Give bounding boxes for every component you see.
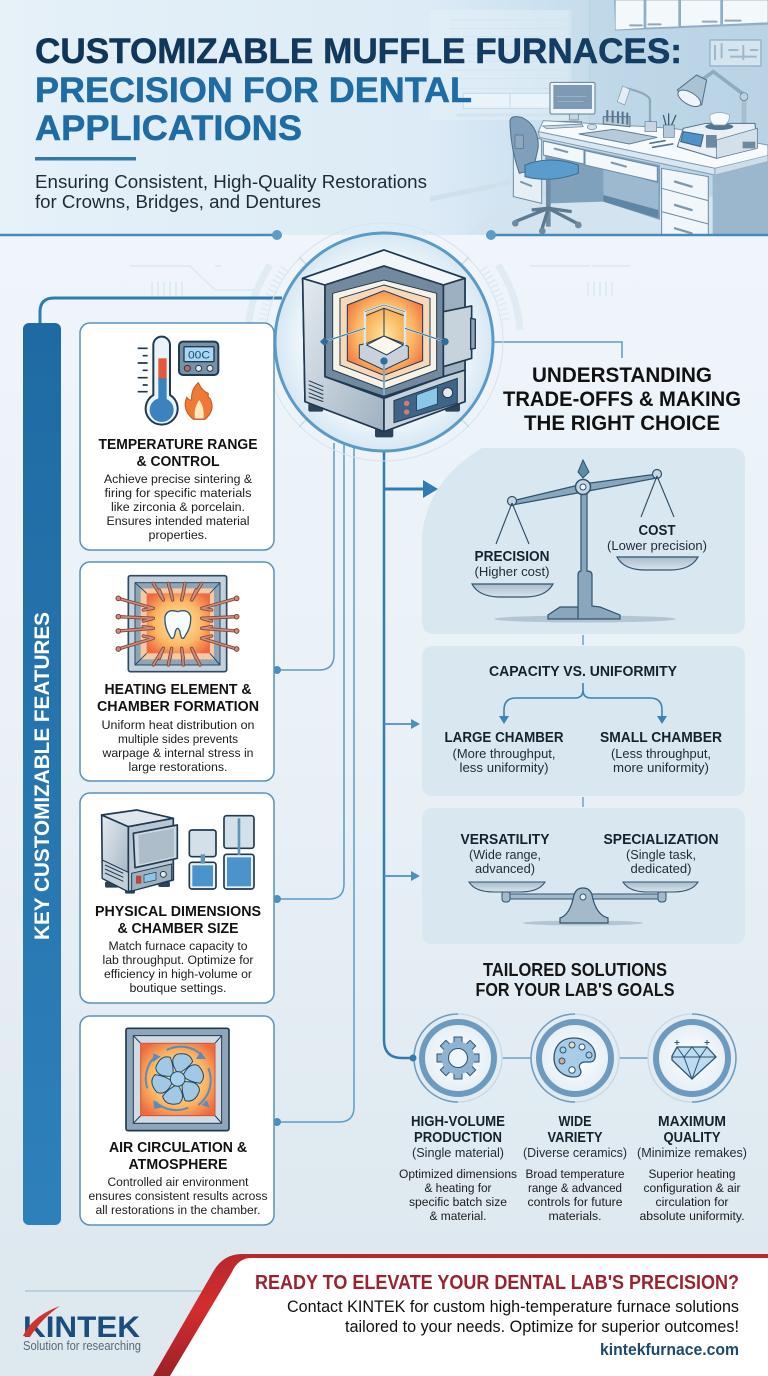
call to action text: kintekfurnace.com [600, 1341, 739, 1359]
label: small chamber: SMALL CHAMBER [600, 730, 723, 746]
header divider with nodes [0, 230, 768, 240]
goal text: specific batch size [409, 1195, 507, 1209]
label: precision: (Higher cost) [474, 564, 550, 579]
goal text: Broad temperature [526, 1167, 625, 1181]
card text [97, 682, 259, 774]
wall poster [710, 40, 761, 66]
faint technical background decoration [130, 265, 630, 330]
furnace control panel [394, 378, 457, 423]
goal text: Superior heating [648, 1167, 736, 1181]
goal text: range & advanced [528, 1181, 622, 1195]
label: large chamber: (More throughput, [452, 746, 556, 761]
title: APPLICATIONS [35, 109, 302, 148]
icon: furnace with chamber sizes [102, 810, 254, 894]
card text: TEMPERATURE RANGE [98, 437, 258, 453]
feature card: temperature [80, 323, 274, 550]
card text: all restorations in the chamber. [96, 1203, 260, 1217]
goal text: QUALITY [664, 1130, 721, 1146]
card text: properties. [148, 528, 208, 542]
connector: circle to sidebar [40, 298, 282, 323]
icon: balance scale [472, 460, 698, 622]
title: PRECISION FOR DENTAL [35, 71, 472, 110]
panel: capacity vs uniformity [422, 646, 745, 796]
card text: Ensures intended material [106, 514, 250, 528]
card text: Controlled air environment [108, 1175, 249, 1189]
sterilizer device with tooth [677, 112, 757, 158]
label: large chamber: less uniformity) [460, 760, 548, 775]
sidebar: key customizable features [23, 323, 61, 1225]
card text: multiple sides prevents [118, 732, 238, 746]
label: precision: PRECISION [474, 549, 550, 565]
goal: high volume [399, 1014, 517, 1223]
monitor [550, 82, 595, 124]
card text: ATMOSPHERE [128, 1157, 228, 1173]
card text: Match furnace capacity to [108, 939, 248, 953]
goal: maximum quality [637, 1014, 747, 1223]
card text: boutique settings. [130, 981, 226, 995]
card text: & CHAMBER SIZE [118, 921, 239, 937]
wall cabinets [614, 0, 768, 31]
furnace callouts [324, 328, 445, 395]
call to action text: tailored to your needs. Optimize for superior outcomes! [345, 1318, 739, 1336]
label: large chamber: LARGE CHAMBER [444, 730, 564, 746]
feature card: dimensions [80, 793, 274, 1003]
test tubes, small lamp and pens [603, 86, 676, 137]
label: cost: (Lower precision) [607, 538, 707, 553]
heading: trade-offs: THE RIGHT CHOICE [524, 412, 720, 435]
goal text [637, 1114, 747, 1223]
goal text: VARIETY [548, 1130, 603, 1146]
card text [88, 1140, 268, 1217]
chair [510, 117, 582, 234]
heading: trade-offs: TRADE-OFFS & MAKING [503, 388, 741, 411]
card text: Achieve precise sintering & [104, 472, 253, 486]
logo: KINTEK: Solution for researching [23, 1339, 141, 1353]
goal text: circulation for [656, 1195, 728, 1209]
goal text: (Single material) [412, 1145, 504, 1160]
branching arrows [499, 683, 667, 724]
label: small chamber [600, 730, 723, 775]
card text: AIR CIRCULATION & [109, 1140, 248, 1156]
label: large chamber [444, 730, 564, 775]
goal text: & heating for [424, 1181, 492, 1195]
feature card: air circulation [80, 1016, 274, 1225]
heading: trade-offs [503, 364, 741, 435]
label: cost: COST [638, 523, 676, 539]
card text [98, 437, 258, 542]
call to action text: Contact KINTEK for custom high-temperature furnace solutions [287, 1298, 739, 1316]
goal text: PRODUCTION [414, 1130, 502, 1146]
card text: efficiency in high-volume or [104, 967, 252, 981]
subtitle [35, 171, 427, 212]
label: specialization [604, 832, 718, 876]
subtitle: Ensuring Consistent, High-Quality Restorations [35, 171, 427, 192]
logo: KINTEK [23, 1306, 141, 1353]
call to action text [255, 1272, 739, 1359]
card text: firing for specific materials [104, 486, 252, 500]
heading: trade-offs: UNDERSTANDING [532, 364, 712, 387]
title [35, 32, 682, 148]
goal text: MAXIMUM [658, 1114, 726, 1130]
icon: palette [531, 1014, 619, 1102]
goal text: WIDE [558, 1114, 592, 1130]
connector: spine with arrows [384, 450, 438, 1058]
logo: KINTEK: KINTEK [23, 1311, 140, 1344]
goal text: & material. [430, 1209, 486, 1223]
icon: diamond [648, 1014, 736, 1102]
desk [513, 121, 768, 240]
subtitle: for Crowns, Bridges, and Dentures [35, 191, 321, 212]
panel: versatility vs specialization [422, 808, 745, 944]
card text: like zirconia & porcelain. [111, 500, 245, 514]
card text: warpage & internal stress in [102, 746, 254, 760]
goal text [399, 1114, 517, 1223]
furnace door [443, 306, 472, 367]
card text [95, 904, 261, 995]
panel: precision vs cost [422, 448, 745, 634]
label: precision [474, 549, 550, 579]
goal text: configuration & air [644, 1181, 740, 1195]
label: versatility: advanced) [475, 861, 535, 876]
title: CUSTOMIZABLE MUFFLE FURNACES: [35, 32, 682, 71]
goal text: (Minimize remakes) [637, 1145, 747, 1160]
label: small chamber: more uniformity) [613, 760, 709, 775]
sidebar: key customizable features: KEY CUSTOMIZABLE FEATURES [31, 612, 54, 940]
icon: level balance [469, 882, 698, 926]
heading: tailored solutions: TAILORED SOLUTIONS [483, 959, 667, 980]
card text: HEATING ELEMENT & [104, 682, 252, 698]
card text: PHYSICAL DIMENSIONS [95, 904, 261, 920]
card text: large restorations. [128, 760, 228, 774]
label: cost [607, 523, 707, 553]
icon: gear [414, 1014, 502, 1102]
footer [23, 1254, 768, 1376]
card text: Uniform heat distribution on [102, 718, 255, 732]
goal text [523, 1114, 627, 1223]
feature card: heating element [80, 562, 274, 781]
goal text: (Diverse ceramics) [523, 1145, 627, 1160]
panel: capacity vs uniformity: CAPACITY VS. UNIFORMITY [489, 664, 677, 680]
panel connector lines [582, 635, 584, 807]
goal: wide variety [523, 1014, 627, 1223]
big lamp [675, 72, 748, 126]
connectors between goal circles [412, 1057, 648, 1059]
goal text: HIGH-VOLUME [411, 1114, 505, 1130]
icon: heating chamber and tooth [116, 576, 239, 672]
footer red band and white panel [153, 1254, 768, 1376]
label: specialization: dedicated) [630, 861, 692, 876]
header band [0, 0, 768, 240]
goal text: Optimized dimensions [399, 1167, 517, 1181]
furnace medallion [265, 223, 503, 461]
label: versatility: VERSATILITY [460, 832, 550, 848]
label: specialization: (Single task, [626, 847, 696, 862]
card text: & CONTROL [136, 454, 220, 470]
goal text: controls for future [528, 1195, 623, 1209]
card text: CHAMBER FORMATION [97, 699, 259, 715]
icon: thermometer, display, flame [138, 337, 218, 425]
goal text: materials. [548, 1209, 602, 1223]
icon: circulation fan [126, 1028, 229, 1131]
label: small chamber: (Less throughput, [611, 746, 711, 761]
heading: tailored solutions: FOR YOUR LAB'S GOALS [476, 979, 674, 1000]
goal text: absolute uniformity. [640, 1209, 744, 1223]
connector: circle to right heading [493, 342, 622, 358]
label: specialization: SPECIALIZATION [604, 832, 718, 848]
illustration: dental lab desk [430, 0, 768, 240]
label: versatility: (Wide range, [469, 847, 541, 862]
card text: ensures consistent results across [88, 1189, 268, 1203]
furnace illustration [303, 250, 475, 437]
label: versatility [460, 832, 550, 876]
title rule [35, 157, 136, 160]
card text: lab throughput. Optimize for [102, 953, 254, 967]
icon: thermometer, display, flame: 00C [188, 350, 210, 362]
connectors: circle to feature cards [263, 342, 354, 1126]
heading: tailored solutions [476, 959, 674, 1000]
